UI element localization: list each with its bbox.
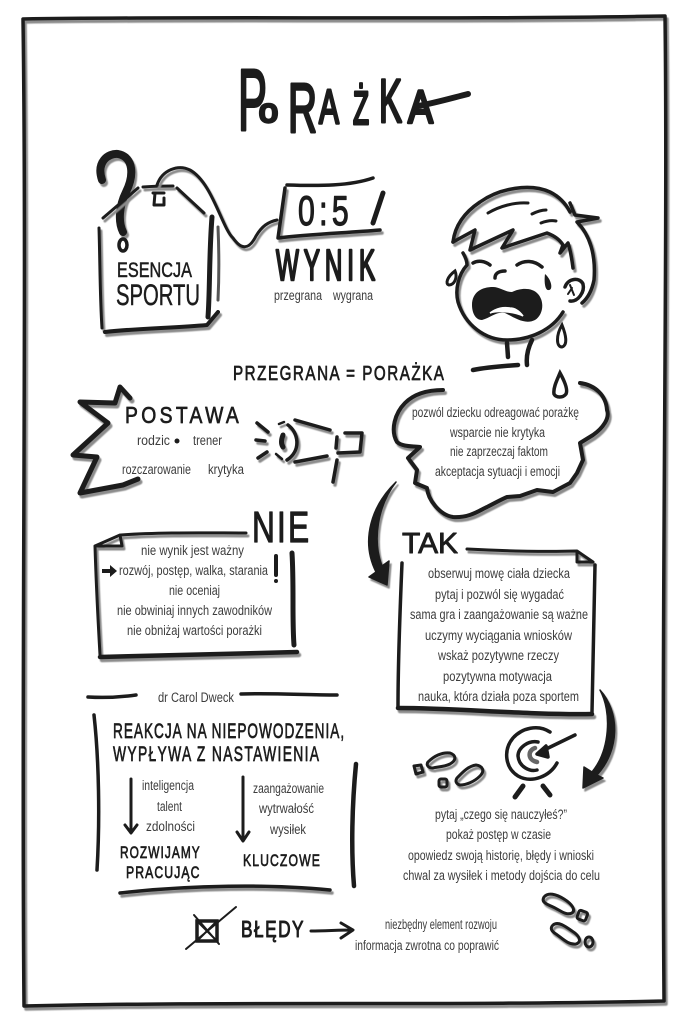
title: Ż: [353, 82, 369, 134]
thought cloud: [394, 373, 608, 517]
burst: postawa: trener: [193, 433, 222, 448]
author line: dr Carol Dweck: [88, 690, 337, 705]
text: advice list: pytaj „czego się nauczyłeś?”: [435, 807, 567, 822]
icon: footsteps lower: [543, 894, 593, 947]
panel: tak: nauka, która działa poza sportem: [418, 689, 579, 704]
thought cloud: pozwól dziecku odreagować porażkę: [412, 405, 579, 420]
panel: mindset: wysiłek: [269, 822, 306, 837]
burst: postawa: rozczarowanie: [122, 462, 191, 477]
heading: przegrana = porażka: PRZEGRANA = PORAŻKA: [233, 362, 445, 385]
title: A: [408, 81, 433, 133]
panel: mindset: zaangażowanie: [253, 781, 324, 796]
text: advice list: pokaż postęp w czasie: [446, 827, 551, 842]
icon: question mark: [100, 154, 131, 251]
text: advice list: chwal za wysiłek i metody dojścia do celu: [403, 868, 600, 883]
text: bledy explanation: niezbędny element rozwoju: [385, 917, 497, 932]
scoreboard 0:5: 0:5: [298, 187, 353, 234]
panel: nie: nie wynik jest ważny: [141, 543, 244, 558]
text: bledy explanation: [355, 917, 499, 953]
icon: pointer arrow: [102, 565, 117, 577]
panel: mindset: inteligencja: [142, 778, 194, 793]
title: P: [238, 52, 267, 149]
arrow: growth mindset: [237, 777, 249, 841]
panel: nie: nie obwiniaj innych zawodników: [117, 603, 272, 618]
title: [238, 52, 468, 149]
panel: tak: sama gra i zaangażowanie są ważne: [410, 607, 588, 622]
panel: mindset: ROZWIJAMY: [120, 844, 201, 863]
icon: crying boy: [447, 187, 598, 370]
tag: esencja sportu: [99, 168, 277, 332]
icon: target with arrow: [507, 728, 575, 797]
heading: wynik: WYNIK: [276, 240, 380, 290]
panel: tak: uczymy wyciągania wniosków: [425, 628, 572, 643]
arrow: tak to goals: [583, 690, 615, 788]
panel: tak: TAK: [402, 528, 459, 560]
result labels: przegrana: [274, 288, 322, 303]
text: bledy explanation: informacja zwrotna co poprawić: [355, 938, 499, 953]
panel: nie: [95, 503, 311, 657]
panel: mindset: zdolności: [146, 819, 195, 834]
burst: postawa: [73, 387, 244, 493]
panel: mindset: PRACUJĄC: [126, 864, 201, 883]
icon: crossed box: [186, 907, 236, 949]
text: advice list: opowiedz swoją historię, błędy i wnioski: [408, 848, 594, 863]
panel: tak: pytaj i pozwól się wygadać: [435, 587, 564, 602]
text: advice list: [403, 807, 600, 883]
thought cloud: nie zaprzeczaj faktom: [450, 444, 548, 459]
tag: esencja sportu: ESENCJA: [117, 259, 192, 282]
panel: tak: wskaż pozytywne rzeczy: [437, 648, 559, 663]
heading: bledy: BŁĘDY: [241, 918, 305, 943]
panel: mindset: KLUCZOWE: [243, 852, 321, 871]
panel: mindset: WYPŁYWA Z NASTAWIENIA: [113, 742, 320, 766]
panel: mindset: wytrwałość: [258, 801, 314, 816]
panel: tak: obserwuj mowę ciała dziecka: [428, 566, 570, 581]
arrow: cloud to tak: [369, 482, 396, 585]
tag: esencja sportu: SPORTU: [116, 279, 200, 312]
burst: postawa: POSTAWA: [125, 404, 242, 428]
thought cloud: akceptacja sytuacji i emocji: [435, 464, 560, 479]
arrow: bledy: [311, 923, 353, 938]
author line: dr Carol Dweck: dr Carol Dweck: [158, 690, 234, 705]
panel: nie: NIE: [252, 503, 311, 552]
panel: mindset: [94, 715, 356, 893]
panel: nie: nie obniżaj wartości porażki: [127, 623, 262, 638]
icon: footsteps upper: [414, 753, 483, 787]
result labels: [274, 288, 373, 303]
title: R: [288, 69, 317, 147]
result labels: wygrana: [332, 288, 373, 303]
title: A: [319, 81, 339, 134]
panel: mindset: talent: [157, 799, 182, 814]
icon: megaphone: [256, 420, 362, 482]
panel: tak: [398, 528, 595, 714]
panel: nie: rozwój, postęp, walka, starania: [119, 563, 268, 578]
panel: tak: pozytywna motywacja: [443, 669, 552, 684]
thought cloud: wsparcie nie krytyka: [449, 425, 545, 440]
title: K: [379, 67, 402, 135]
panel: nie: nie oceniaj: [169, 583, 220, 598]
panel: mindset: REAKCJA NA NIEPOWODZENIA,: [113, 719, 345, 743]
burst: postawa: krytyka: [208, 462, 244, 477]
title: o: [259, 92, 278, 129]
burst: postawa: rodzic: [137, 433, 170, 448]
scoreboard 0:5: [278, 178, 383, 238]
arrow: fixed mindset: [125, 779, 137, 833]
